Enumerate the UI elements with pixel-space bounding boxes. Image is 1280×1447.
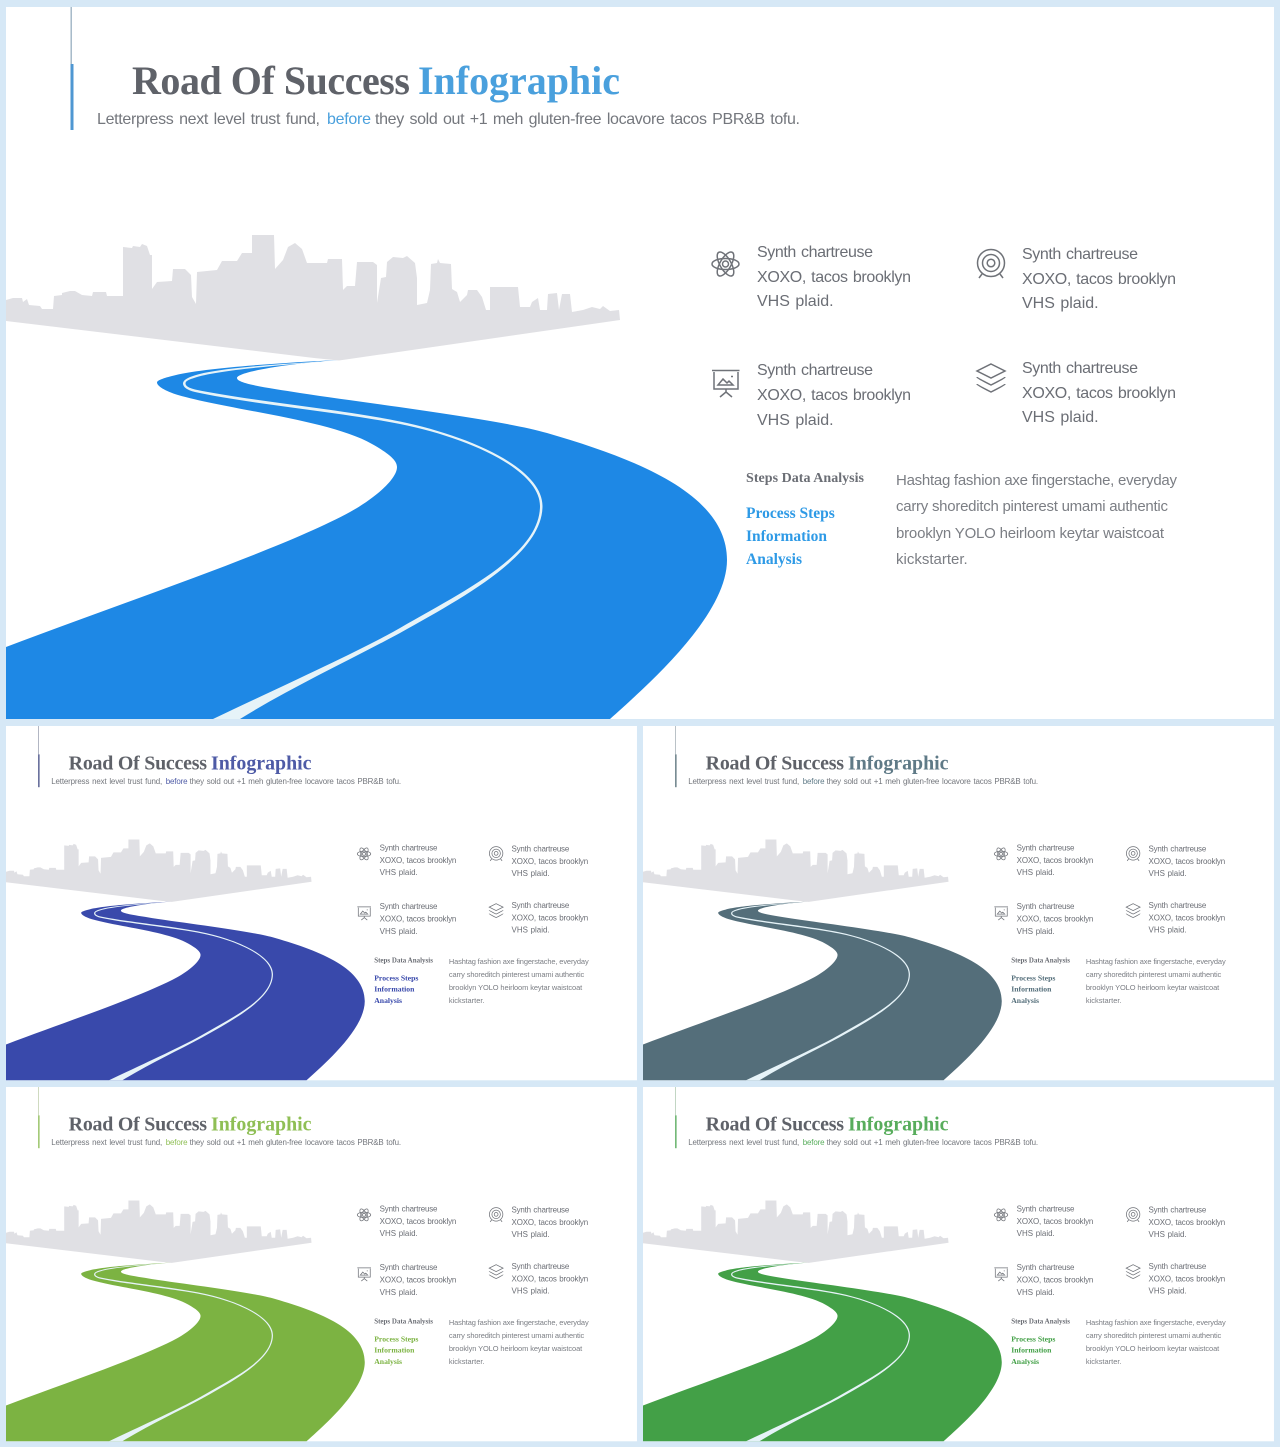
text: item one: VHS plaid.: [380, 868, 418, 877]
subtitle: before: [166, 1138, 188, 1147]
title: Road Of Success: [69, 1113, 207, 1135]
skyline: [6, 235, 620, 360]
subtitle: before: [803, 777, 825, 786]
road: [643, 1263, 1002, 1441]
subtitle: they sold out +1 meh gluten-free locavore tacos PBR&B tofu.: [827, 777, 1038, 786]
text: item one: XOXO, tacos brooklyn: [380, 856, 456, 865]
text: item two: Synth chartreuse: [512, 844, 570, 853]
icon: target: [1126, 847, 1140, 861]
paragraph: carry shoreditch pinterest umami authentic: [449, 1331, 584, 1340]
title: [132, 58, 620, 103]
process steps list: Analysis: [374, 996, 402, 1005]
text: item two: XOXO, tacos brooklyn: [1022, 271, 1176, 288]
text: item four: VHS plaid.: [1022, 409, 1099, 426]
process steps list: Process Steps: [1011, 1334, 1055, 1343]
text: item four: XOXO, tacos brooklyn: [1022, 385, 1176, 402]
text: item one: VHS plaid.: [1017, 1229, 1055, 1238]
text: item two: Synth chartreuse: [512, 1205, 570, 1214]
paragraph: Hashtag fashion axe fingerstache, everyday: [1086, 957, 1226, 966]
text: item one: XOXO, tacos brooklyn: [757, 269, 911, 286]
paragraph: carry shoreditch pinterest umami authentic: [449, 970, 584, 979]
process steps list: Process Steps: [374, 1334, 418, 1343]
text: item one: VHS plaid.: [380, 1229, 418, 1238]
text: item one: Synth chartreuse: [1017, 1204, 1075, 1213]
icon: target: [489, 1208, 503, 1222]
panel: main slide blue: [6, 7, 1274, 719]
subtitle: [688, 1138, 1038, 1147]
process steps list: Analysis: [1011, 1357, 1039, 1366]
subtitle: before: [327, 111, 371, 128]
text: item one: [380, 1204, 456, 1238]
icon: presentation board: [357, 1268, 371, 1281]
text: item three: XOXO, tacos brooklyn: [757, 387, 911, 404]
text: item two: [512, 1205, 588, 1239]
paragraph: [1086, 957, 1226, 1005]
subtitle: before: [803, 1138, 825, 1147]
text: item two: VHS plaid.: [512, 869, 550, 878]
process steps list: Analysis: [374, 1357, 402, 1366]
text: item three: XOXO, tacos brooklyn: [380, 1276, 456, 1285]
icon: layers: [489, 1265, 503, 1279]
paragraph: carry shoreditch pinterest umami authentic: [1086, 1331, 1221, 1340]
subtitle: [51, 777, 401, 786]
panel: indigo slide: [6, 726, 637, 1080]
process steps list: [374, 973, 418, 1005]
road: [6, 360, 727, 719]
title: Infographic: [848, 1113, 949, 1135]
text: item four: VHS plaid.: [1149, 926, 1187, 935]
text: item one: VHS plaid.: [1017, 868, 1055, 877]
accent bar: [675, 754, 677, 787]
text: item one: [1017, 843, 1093, 877]
text: item three: [380, 1263, 456, 1297]
subtitle: they sold out +1 meh gluten-free locavore tacos PBR&B tofu.: [827, 1138, 1038, 1147]
paragraph: [449, 1318, 589, 1366]
paragraph: kickstarter.: [449, 1357, 484, 1366]
paragraph: brooklyn YOLO heirloom keytar waistcoat: [896, 525, 1165, 542]
text: item four: XOXO, tacos brooklyn: [1149, 914, 1225, 923]
panel: light green slide: [6, 1087, 637, 1441]
text: item one: [757, 244, 911, 310]
title: [706, 1113, 949, 1135]
title: [706, 752, 949, 774]
text: item three: [380, 902, 456, 936]
text: item two: XOXO, tacos brooklyn: [1149, 1218, 1225, 1227]
text: item two: Synth chartreuse: [1149, 844, 1207, 853]
text: item four: Synth chartreuse: [1149, 1262, 1207, 1271]
process steps list: Information: [1011, 985, 1052, 994]
icon: atom: [994, 1208, 1008, 1222]
text: item four: Synth chartreuse: [512, 1262, 570, 1271]
text: item four: [512, 901, 588, 935]
text: item three: [1017, 1263, 1093, 1297]
process steps list: Information: [746, 528, 827, 545]
text: item one: [1017, 1204, 1093, 1238]
subtitle: [51, 1138, 401, 1147]
title: Infographic: [418, 58, 620, 103]
text: item one: Synth chartreuse: [380, 843, 438, 852]
icon: layers: [1126, 1265, 1140, 1279]
skyline: [643, 1200, 949, 1263]
text: item two: Synth chartreuse: [1149, 1205, 1207, 1214]
text: item three: XOXO, tacos brooklyn: [1017, 915, 1093, 924]
title: Infographic: [211, 1113, 312, 1135]
title: Road Of Success: [706, 752, 844, 774]
process steps list: [1011, 1334, 1055, 1366]
paragraph: Hashtag fashion axe fingerstache, everyday: [449, 957, 589, 966]
text: item three: [1017, 902, 1093, 936]
icon: presentation board: [357, 907, 371, 920]
process steps list: [374, 1334, 418, 1366]
text: item three: Synth chartreuse: [1017, 902, 1075, 911]
text: item four: [1022, 360, 1176, 426]
process steps list: Analysis: [1011, 996, 1039, 1005]
process steps list: [1011, 973, 1055, 1005]
paragraph: kickstarter.: [1086, 1357, 1121, 1366]
text: item two: [1022, 246, 1176, 312]
accent bar: [675, 1115, 677, 1148]
icon: atom: [357, 847, 371, 861]
paragraph: brooklyn YOLO heirloom keytar waistcoat: [449, 1344, 583, 1353]
subtitle: Letterpress next level trust fund,: [51, 777, 162, 786]
subtitle: before: [166, 777, 188, 786]
paragraph: Hashtag fashion axe fingerstache, everyday: [896, 472, 1178, 489]
text: item four: XOXO, tacos brooklyn: [512, 914, 588, 923]
text: item four: [1149, 1262, 1225, 1296]
skyline: [6, 1200, 312, 1263]
text: item two: VHS plaid.: [1149, 869, 1187, 878]
title: Infographic: [211, 752, 312, 774]
panel: slate slide: [643, 726, 1274, 1080]
steps heading: Steps Data Analysis: [374, 1317, 433, 1325]
road: [6, 1263, 365, 1441]
road: [643, 902, 1002, 1080]
steps heading: Steps Data Analysis: [1011, 1317, 1070, 1325]
icon: layers: [977, 364, 1005, 392]
paragraph: kickstarter.: [1086, 996, 1121, 1005]
steps heading: Steps Data Analysis: [374, 956, 433, 964]
text: item four: VHS plaid.: [512, 926, 550, 935]
accent bar: [38, 754, 40, 787]
text: item one: VHS plaid.: [757, 293, 834, 310]
text: item three: [757, 362, 911, 429]
process steps list: Information: [1011, 1346, 1052, 1355]
title: Road Of Success: [706, 1113, 844, 1135]
title: Road Of Success: [69, 752, 207, 774]
paragraph: brooklyn YOLO heirloom keytar waistcoat: [449, 983, 583, 992]
text: item four: [512, 1262, 588, 1296]
text: item one: [380, 843, 456, 877]
paragraph: [1086, 1318, 1226, 1366]
subtitle: [97, 111, 800, 128]
text: item three: XOXO, tacos brooklyn: [380, 915, 456, 924]
text: item three: Synth chartreuse: [757, 362, 873, 379]
text: item two: [1149, 1205, 1225, 1239]
panel: green slide: [643, 1087, 1274, 1441]
text: item two: VHS plaid.: [512, 1230, 550, 1239]
subtitle: Letterpress next level trust fund,: [51, 1138, 162, 1147]
text: item two: VHS plaid.: [1022, 295, 1099, 312]
text: item four: XOXO, tacos brooklyn: [512, 1275, 588, 1284]
icon: atom: [712, 250, 739, 278]
steps heading: Steps Data Analysis: [746, 471, 865, 486]
text: item two: XOXO, tacos brooklyn: [1149, 857, 1225, 866]
text: item four: [1149, 901, 1225, 935]
text: item three: VHS plaid.: [757, 412, 834, 429]
skyline: [643, 839, 949, 902]
paragraph: Hashtag fashion axe fingerstache, everyday: [449, 1318, 589, 1327]
title: Road Of Success: [132, 58, 410, 103]
accent bar: [38, 1115, 40, 1148]
process steps list: [746, 505, 835, 568]
paragraph: kickstarter.: [896, 551, 968, 568]
icon: target: [978, 250, 1004, 278]
text: item four: XOXO, tacos brooklyn: [1149, 1275, 1225, 1284]
paragraph: [449, 957, 589, 1005]
title: [69, 752, 312, 774]
process steps list: Information: [374, 985, 415, 994]
icon: presentation board: [712, 370, 740, 397]
subtitle: [688, 777, 1038, 786]
process steps list: Process Steps: [374, 973, 418, 982]
icon: target: [489, 847, 503, 861]
process steps list: Analysis: [746, 551, 802, 568]
text: item three: Synth chartreuse: [380, 902, 438, 911]
text: item three: VHS plaid.: [380, 927, 418, 936]
steps heading: Steps Data Analysis: [1011, 956, 1070, 964]
subtitle: they sold out +1 meh gluten-free locavore tacos PBR&B tofu.: [375, 111, 800, 128]
title: [69, 1113, 312, 1135]
skyline: [6, 839, 312, 902]
text: item four: Synth chartreuse: [512, 901, 570, 910]
text: item two: XOXO, tacos brooklyn: [512, 857, 588, 866]
text: item one: Synth chartreuse: [1017, 843, 1075, 852]
text: item one: Synth chartreuse: [757, 244, 873, 261]
paragraph: carry shoreditch pinterest umami authentic: [1086, 970, 1221, 979]
icon: presentation board: [994, 907, 1008, 920]
subtitle: Letterpress next level trust fund,: [688, 777, 799, 786]
text: item three: VHS plaid.: [1017, 1288, 1055, 1297]
icon: presentation board: [994, 1268, 1008, 1281]
process steps list: Process Steps: [1011, 973, 1055, 982]
process steps list: Process Steps: [746, 505, 835, 522]
text: item three: Synth chartreuse: [380, 1263, 438, 1272]
subtitle: Letterpress next level trust fund,: [97, 111, 320, 128]
paragraph: [896, 472, 1178, 568]
text: item one: XOXO, tacos brooklyn: [1017, 856, 1093, 865]
icon: atom: [357, 1208, 371, 1222]
text: item four: VHS plaid.: [512, 1287, 550, 1296]
text: item three: Synth chartreuse: [1017, 1263, 1075, 1272]
paragraph: brooklyn YOLO heirloom keytar waistcoat: [1086, 983, 1220, 992]
text: item two: VHS plaid.: [1149, 1230, 1187, 1239]
paragraph: kickstarter.: [449, 996, 484, 1005]
icon: layers: [1126, 904, 1140, 918]
text: item three: VHS plaid.: [380, 1288, 418, 1297]
paragraph: brooklyn YOLO heirloom keytar waistcoat: [1086, 1344, 1220, 1353]
road: [6, 902, 365, 1080]
accent bar: [70, 64, 74, 130]
text: item two: Synth chartreuse: [1022, 246, 1138, 263]
icon: atom: [994, 847, 1008, 861]
text: item three: VHS plaid.: [1017, 927, 1055, 936]
paragraph: carry shoreditch pinterest umami authentic: [896, 498, 1168, 515]
text: item four: Synth chartreuse: [1022, 360, 1138, 377]
title: Infographic: [848, 752, 949, 774]
subtitle: they sold out +1 meh gluten-free locavore tacos PBR&B tofu.: [190, 1138, 401, 1147]
text: item two: XOXO, tacos brooklyn: [512, 1218, 588, 1227]
text: item one: XOXO, tacos brooklyn: [1017, 1217, 1093, 1226]
text: item one: XOXO, tacos brooklyn: [380, 1217, 456, 1226]
text: item four: VHS plaid.: [1149, 1287, 1187, 1296]
process steps list: Information: [374, 1346, 415, 1355]
paragraph: Hashtag fashion axe fingerstache, everyday: [1086, 1318, 1226, 1327]
subtitle: they sold out +1 meh gluten-free locavore tacos PBR&B tofu.: [190, 777, 401, 786]
text: item three: XOXO, tacos brooklyn: [1017, 1276, 1093, 1285]
icon: layers: [489, 904, 503, 918]
text: item two: [1149, 844, 1225, 878]
icon: target: [1126, 1208, 1140, 1222]
text: item four: Synth chartreuse: [1149, 901, 1207, 910]
subtitle: Letterpress next level trust fund,: [688, 1138, 799, 1147]
text: item one: Synth chartreuse: [380, 1204, 438, 1213]
text: item two: [512, 844, 588, 878]
